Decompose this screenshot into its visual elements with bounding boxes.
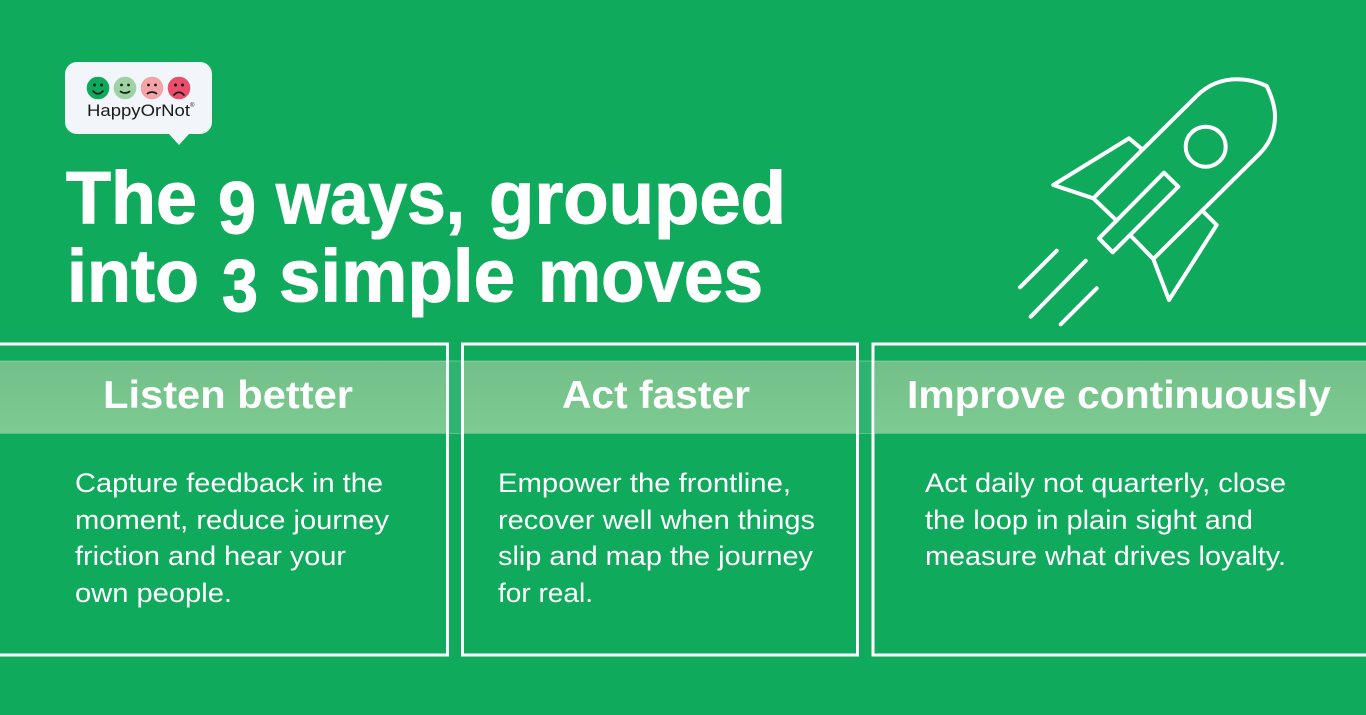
title: moves [538,234,763,318]
title: 3 [222,244,258,327]
text: Act faster description: Empower the frontline, [498,468,791,498]
text: Improve continuously description: Act daily not quarterly, close [925,468,1286,498]
title: grouped [489,156,786,240]
title: ways, [275,156,465,240]
title [66,156,786,327]
panel: Act faster [462,344,858,655]
text: Improve continuously description: the loop in plain sight and [925,505,1253,535]
text: Act faster description: recover well when things [498,505,815,535]
icon: rocket [1020,79,1275,324]
heading: Act faster: Act faster [562,374,750,417]
text: Improve continuously description [925,468,1286,571]
text: Listen better description: moment, reduce journey [75,505,390,535]
text: Listen better description: Capture feedback in the [75,468,383,498]
panel: Improve continuously [873,344,1366,655]
heading: Listen better: Listen better [103,374,353,417]
text: Act faster description [498,468,815,608]
title: simple [279,234,515,318]
translucent band behind the headings [0,360,1366,434]
title: The [66,156,197,240]
logo: HappyOrNot speech bubble [65,62,212,145]
text: Listen better description: friction and hear your [75,541,346,571]
text: Listen better description: own people. [75,578,232,608]
logo: HappyOrNot speech bubble: HappyOrNot [87,101,190,120]
text: Improve continuously description: measure what drives loyalty. [925,541,1286,571]
heading: Improve continuously: Improve continuously [907,374,1331,417]
text: Act faster description: slip and map the journey [498,541,814,571]
title: into [67,234,199,318]
panel: Listen better [0,344,448,655]
text: Listen better description [75,468,390,608]
title: 9 [218,166,256,250]
text: Act faster description: for real. [498,578,593,608]
logo: HappyOrNot speech bubble: ® [190,102,195,109]
